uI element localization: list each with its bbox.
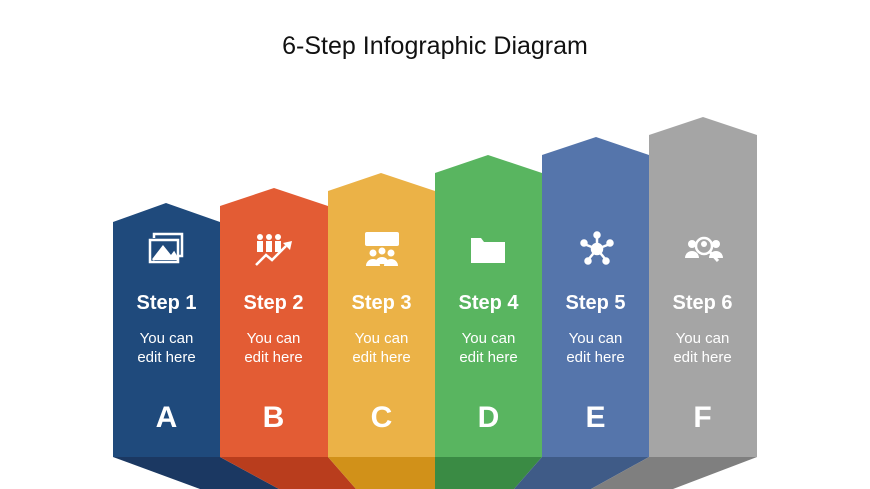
column A xyxy=(113,203,220,457)
text column A: A xyxy=(156,401,177,434)
text column C: edit here xyxy=(352,349,411,366)
text column C: C xyxy=(371,401,392,434)
column F xyxy=(649,117,757,457)
icon: pictures xyxy=(150,234,182,262)
text column A: You can xyxy=(140,330,193,347)
text column B xyxy=(243,292,304,434)
text column F xyxy=(672,292,733,434)
text column D: edit here xyxy=(459,349,518,366)
text column A xyxy=(136,292,197,434)
text column E: edit here xyxy=(566,349,625,366)
column B xyxy=(220,188,328,457)
text column B: You can xyxy=(247,330,300,347)
text column C xyxy=(351,292,412,434)
text column E: E xyxy=(585,401,606,434)
column E xyxy=(542,137,649,457)
icon: folder xyxy=(471,238,505,263)
text column D xyxy=(458,292,519,434)
text column F: F xyxy=(693,401,712,434)
text column A: Step 1 xyxy=(136,292,197,314)
icon: search people xyxy=(685,238,723,261)
icon: network xyxy=(582,232,612,264)
icon: people growth xyxy=(256,234,292,265)
text column A: edit here xyxy=(137,349,196,366)
text column D: Step 4 xyxy=(458,292,519,314)
title: 6-Step Infographic Diagram xyxy=(282,32,588,60)
text column E: You can xyxy=(569,330,622,347)
column C xyxy=(328,173,435,457)
text column C: Step 3 xyxy=(351,292,412,314)
icon: meeting xyxy=(365,232,399,266)
text column B: edit here xyxy=(244,349,303,366)
text column C: You can xyxy=(355,330,408,347)
text column D: You can xyxy=(462,330,515,347)
text column B: B xyxy=(263,401,284,434)
text column E: Step 5 xyxy=(565,292,626,314)
shadows base xyxy=(113,457,757,489)
text column B: Step 2 xyxy=(243,292,304,314)
column D xyxy=(435,155,542,457)
text column F: edit here xyxy=(673,349,732,366)
text column F: You can xyxy=(676,330,729,347)
text column F: Step 6 xyxy=(672,292,733,314)
text column D: D xyxy=(478,401,499,434)
text column E xyxy=(565,292,626,434)
